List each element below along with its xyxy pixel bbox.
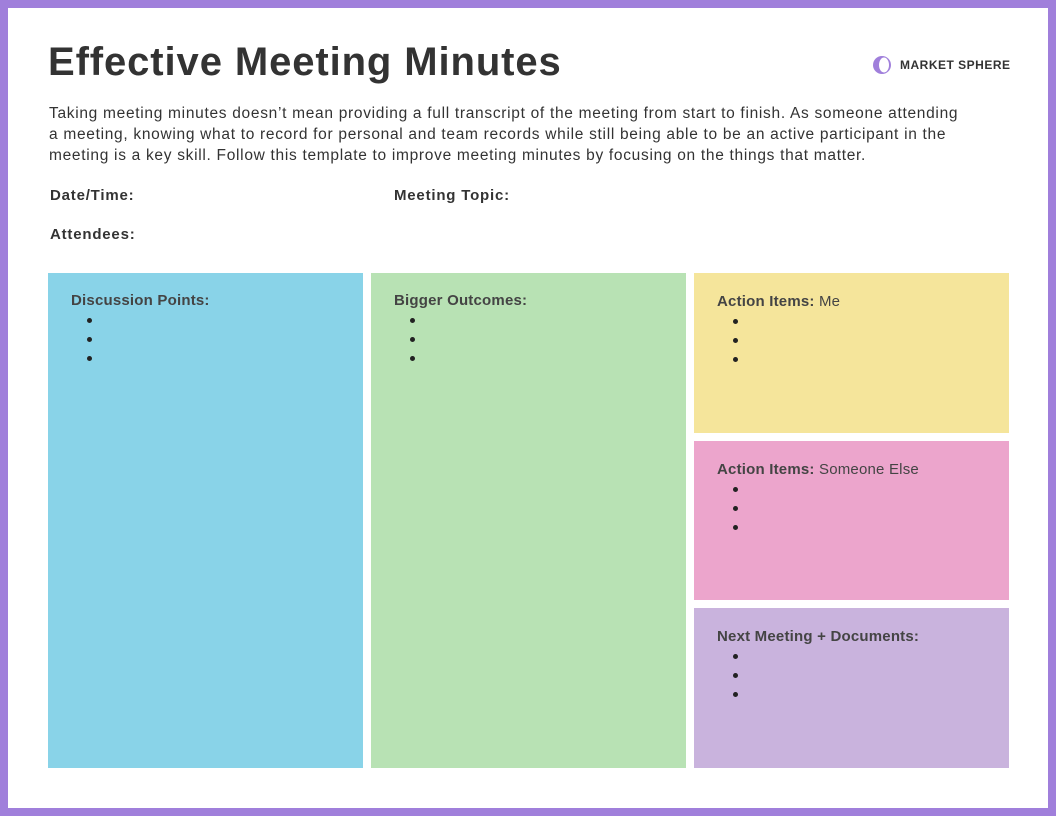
panel: action items me: Action Items: Me <box>717 293 840 310</box>
logo: MARKET SPHERE <box>900 58 1011 72</box>
title: Effective Meeting Minutes <box>48 40 562 84</box>
panel: bigger outcomes <box>371 273 686 768</box>
intro text: Taking meeting minutes doesn’t mean providing a full transcript of the meeting from start to finish. As someone attending <box>49 105 958 122</box>
field: meeting topic: Meeting Topic: <box>394 187 510 204</box>
panel: discussion points: Discussion Points: <box>71 292 210 309</box>
intro text: meeting is a key skill. Follow this template to improve meeting minutes by focusing on the things that matter. <box>49 147 866 164</box>
panel: action items someone else: Action Items: Someone Else <box>717 461 919 478</box>
intro text <box>49 105 958 164</box>
panel: next meeting <box>694 608 1009 768</box>
field: date/time: Date/Time: <box>50 187 134 204</box>
field: attendees: Attendees: <box>50 226 136 243</box>
panel: next meeting: Next Meeting + Documents: <box>717 628 919 645</box>
panel: discussion points <box>48 273 363 768</box>
logo <box>873 56 1011 74</box>
icon: logo moon <box>873 56 891 74</box>
intro text: a meeting, knowing what to record for personal and team records while still being able to be an active participant in the <box>49 126 946 143</box>
panel: action items me <box>694 273 1009 433</box>
panel: bigger outcomes: Bigger Outcomes: <box>394 292 527 309</box>
panel: action items someone else <box>694 441 1009 600</box>
